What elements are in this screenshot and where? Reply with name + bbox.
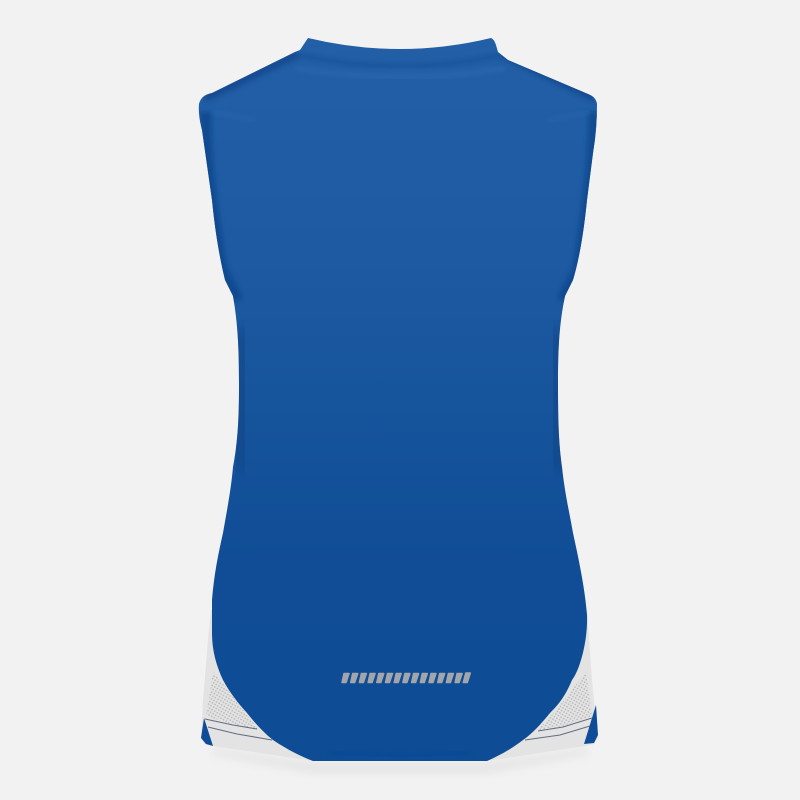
mesh texture: left panel <box>206 672 258 729</box>
stitch lines: left panel <box>205 719 272 740</box>
product illustration: sleeveless sports top, back view <box>198 38 598 772</box>
hem shadow <box>210 748 590 772</box>
mesh texture: right panel <box>537 672 592 731</box>
white side panels silhouette <box>201 610 598 761</box>
blue back body <box>199 38 597 761</box>
stitch lines: right panel <box>525 718 592 740</box>
reflective dash strip <box>342 673 470 682</box>
blue corner: right hem <box>584 705 598 744</box>
fabric shading <box>200 50 597 471</box>
blue corner: left hem <box>201 718 213 746</box>
